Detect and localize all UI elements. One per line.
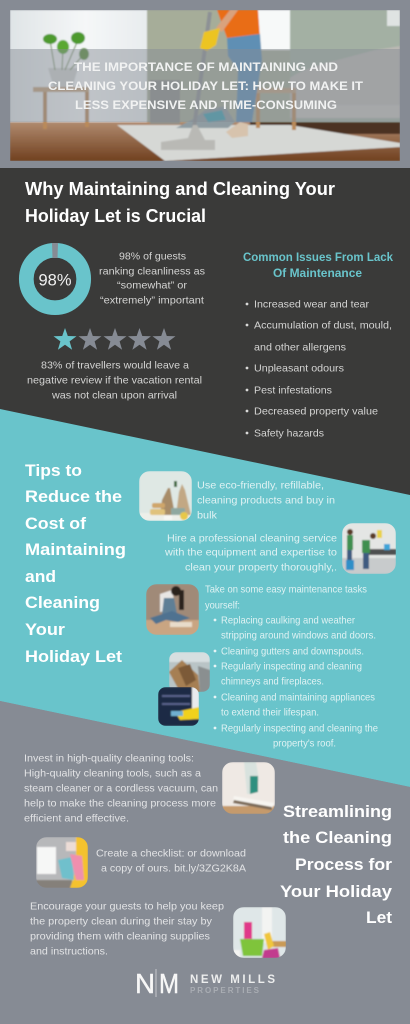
text: eco-friendly products: cleaning products and buy in (197, 494, 335, 506)
text: easy maintenance tasks: property's roof. (273, 738, 336, 750)
photo: cleaning an oven (158, 687, 199, 726)
heading: streamlining the cleaning process: the Cleaning (283, 828, 392, 847)
text: invest in high-quality tools: Invest in high-quality cleaning tools: (24, 752, 194, 764)
text: encourage your guests: Encourage your guests to help you keep (30, 900, 224, 912)
list: common issues: and other allergens (254, 342, 346, 354)
donut chart: 98%: 98% (38, 270, 72, 290)
heading: streamlining the cleaning process (280, 802, 393, 927)
heading: streamlining the cleaning process: Your Holiday (280, 882, 393, 901)
text: eco-friendly products (197, 480, 335, 522)
list: common issues (246, 298, 392, 440)
text: 98% of guests: ranking cleanliness as (99, 266, 205, 278)
heading: tips to reduce the cost: Maintaining (25, 540, 126, 559)
heading: why maintaining is crucial: Holiday Let is Crucial (25, 206, 206, 226)
text: invest in high-quality tools: efficient and effective. (24, 812, 129, 824)
heading: tips to reduce the cost (25, 461, 126, 666)
logo: New Mills Properties (135, 968, 275, 999)
heading: streamlining the cleaning process: Let (366, 908, 392, 927)
logo: New Mills Properties: PROPERTIES (190, 986, 260, 995)
text: professional cleaning service: Hire a professional cleaning service (167, 532, 337, 544)
text: encourage your guests (30, 900, 224, 958)
heading: tips to reduce the cost: Holiday Let (25, 647, 122, 666)
text: easy maintenance tasks: yourself: (205, 600, 240, 612)
text: encourage your guests: providing them with cleaning supplies (30, 930, 210, 942)
list: common issues: Decreased property value (254, 406, 378, 418)
panel: teal section background (0, 409, 410, 787)
text: easy maintenance tasks: chimneys and fireplaces. (221, 676, 324, 688)
heading: streamlining the cleaning process: Process for (295, 855, 392, 874)
text: easy maintenance tasks: Regularly inspecting and cleaning the (221, 722, 378, 734)
heading: common issues (243, 252, 394, 280)
panel: dark section background (0, 168, 410, 498)
text: 83% of travellers: 83% of travellers would leave a (41, 360, 189, 372)
text: professional cleaning service: with the equipment and expertise to (164, 546, 337, 558)
list: common issues: Safety hazards (254, 428, 324, 440)
list: common issues: Unpleasant odours (254, 362, 344, 374)
text: easy maintenance tasks: Cleaning gutters and downspouts. (221, 646, 364, 658)
text: professional cleaning service: clean your property thoroughly,. (185, 562, 337, 574)
list: common issues: Increased wear and tear (254, 298, 370, 310)
text: 83% of travellers (27, 360, 202, 402)
list: common issues: Pest infestations (254, 384, 332, 396)
hero photo: person vacuuming a living room (10, 10, 400, 161)
text: encourage your guests: and instructions. (30, 946, 108, 958)
text: invest in high-quality tools: High-quality cleaning tools, such as a (24, 768, 201, 780)
photo: professional cleaners (342, 523, 396, 574)
panel: grey section wedge (0, 701, 410, 1024)
text: easy maintenance tasks: to extend their lifespan. (221, 706, 319, 718)
text: encourage your guests: the property clean during their stay by (30, 916, 213, 928)
photo: checklist and laundry basket (36, 837, 88, 888)
text: invest in high-quality tools (24, 752, 218, 824)
logo: New Mills Properties: NEW MILLS (190, 974, 275, 986)
text: eco-friendly products: bulk (197, 510, 218, 522)
heading: tips to reduce the cost: Tips to (25, 461, 82, 480)
text: invest in high-quality tools: steam cleaner or a cordless vacuum, can (24, 782, 218, 794)
text: create a checklist: a copy of ours. bit.ly/3ZG2K8A (101, 862, 246, 874)
text: easy maintenance tasks: Take on some easy maintenance tasks (205, 584, 367, 596)
heading: tips to reduce the cost: Reduce the (25, 487, 122, 506)
logo: New Mills Properties: M (159, 968, 179, 999)
photo: woman doing maintenance (146, 584, 199, 635)
photo: eco cleaning products (139, 471, 192, 521)
photo: bucket of cleaning supplies (233, 907, 286, 958)
heading: tips to reduce the cost: Cost of (25, 514, 86, 533)
photo: steam cleaner (222, 762, 275, 814)
title: THE IMPORTANCE OF MAINTAINING AND (74, 60, 338, 74)
text: easy maintenance tasks: Cleaning and maintaining appliances (221, 692, 375, 704)
text: 98% of guests: 98% of guests (119, 250, 186, 262)
title (48, 60, 364, 112)
heading: tips to reduce the cost: Cleaning (25, 593, 100, 612)
text: 83% of travellers: was not clean upon arrival (51, 390, 177, 402)
hero title band (10, 49, 400, 122)
text: 98% of guests: “extremely” important (100, 294, 204, 306)
text: create a checklist: Create a checklist: or download (96, 848, 246, 860)
text: easy maintenance tasks: Replacing caulking and weather (221, 614, 355, 626)
donut chart: 98% (26, 243, 84, 308)
star rating: one of five teal (54, 328, 176, 350)
logo: New Mills Properties: N (135, 968, 155, 999)
text: create a checklist (96, 848, 246, 874)
heading: streamlining the cleaning process: Streamlining (283, 802, 392, 821)
heading: tips to reduce the cost: Your (25, 620, 65, 639)
text: 98% of guests (99, 250, 205, 306)
text: easy maintenance tasks: stripping around windows and doors. (221, 630, 376, 642)
heading: why maintaining is crucial: Why Maintaining and Cleaning Your (25, 179, 335, 199)
text: 83% of travellers: negative review if the vacation rental (27, 374, 202, 386)
heading: common issues: Common Issues From Lack (243, 252, 394, 264)
text: invest in high-quality tools: help to make the cleaning process more (24, 798, 216, 810)
text: 98% of guests: “somewhat” or (117, 280, 188, 292)
text: professional cleaning service (164, 532, 337, 574)
heading: common issues: Of Maintenance (273, 268, 362, 280)
heading: why maintaining is crucial (25, 179, 335, 226)
text: easy maintenance tasks: Regularly inspecting and cleaning (221, 660, 362, 672)
heading: tips to reduce the cost: and (25, 567, 56, 586)
list: common issues: Accumulation of dust, mould, (254, 320, 392, 332)
title: LESS EXPENSIVE AND TIME-CONSUMING (75, 98, 337, 112)
text: eco-friendly products: Use eco-friendly, refillable, (197, 480, 324, 492)
photo: gutter with leaves (169, 652, 210, 692)
title: CLEANING YOUR HOLIDAY LET: HOW TO MAKE IT (48, 79, 364, 93)
text: easy maintenance tasks (205, 584, 378, 750)
